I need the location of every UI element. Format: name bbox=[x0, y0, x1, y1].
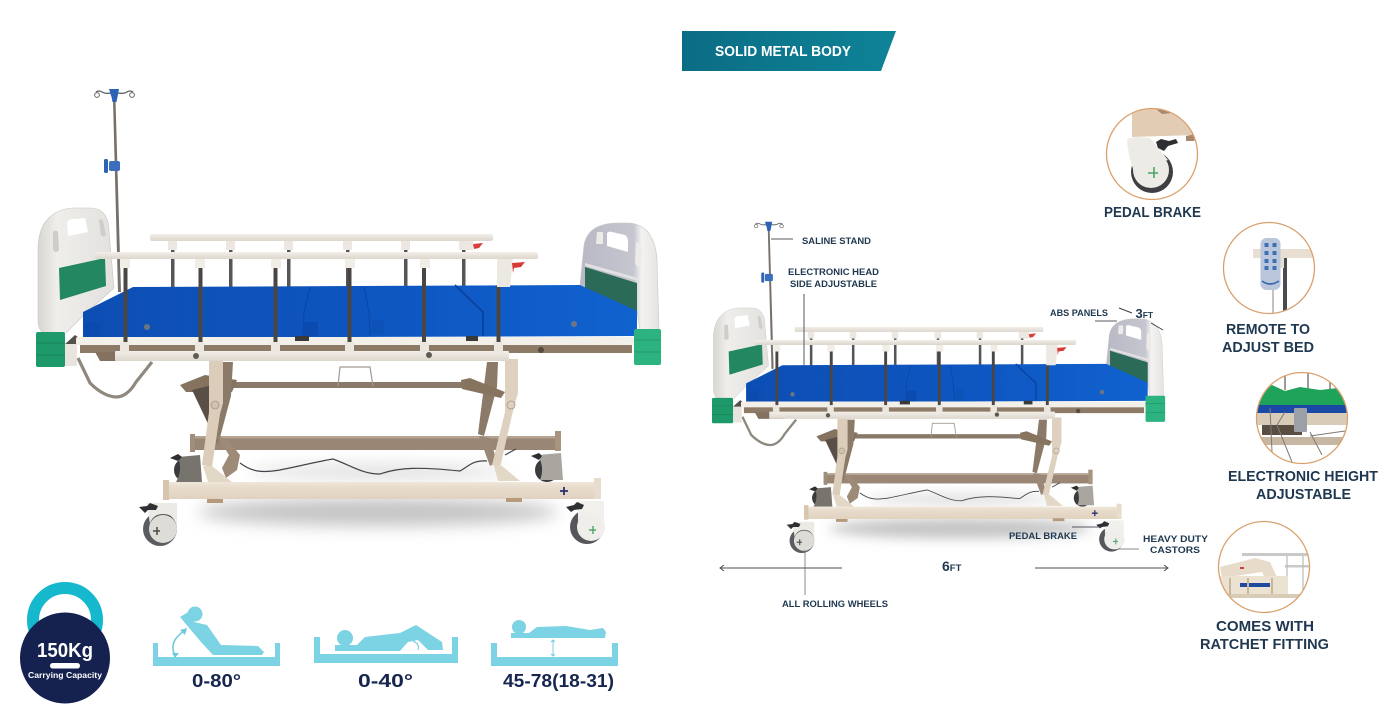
dimension: 6 ft length bbox=[720, 558, 1168, 574]
feature: remote to adjust bed: REMOTE TO bbox=[1226, 321, 1310, 338]
banner: solid metal body bbox=[682, 31, 896, 71]
large hospital bed photo bbox=[36, 89, 661, 546]
feature: remote to adjust bed bbox=[1222, 222, 1315, 356]
deck and frame bbox=[76, 336, 634, 361]
icon: motor control close-up bbox=[1256, 372, 1348, 464]
left mounting bracket and cord bbox=[64, 335, 152, 397]
right headboard bbox=[580, 223, 659, 330]
dimension: 3 ft width bbox=[1119, 306, 1163, 330]
scissor legs bbox=[180, 359, 520, 482]
callout: abs panels: ABS PANELS bbox=[1050, 308, 1108, 319]
hanger and crossbars bbox=[190, 367, 561, 452]
back side rail bbox=[150, 234, 493, 288]
small annotated hospital bed bbox=[712, 222, 1165, 553]
callout: pedal brake: PEDAL BRAKE bbox=[1009, 531, 1077, 542]
undercarriage bbox=[139, 359, 605, 546]
weight capacity badge: 150Kg bbox=[37, 640, 93, 662]
icon: ratchet frame close-up bbox=[1218, 522, 1310, 612]
front base bar bbox=[163, 478, 601, 503]
feature: comes with ratchet fitting: COMES WITH bbox=[1216, 618, 1314, 635]
dimension: 6 ft length: 6FT bbox=[942, 558, 962, 574]
left headboard bbox=[38, 208, 114, 333]
power cable bbox=[240, 449, 516, 474]
feature: pedal brake bbox=[1104, 108, 1201, 221]
green corner bumpers bbox=[36, 329, 661, 367]
feature: remote to adjust bed: ADJUST BED bbox=[1222, 339, 1314, 356]
saline stand bbox=[95, 89, 134, 292]
mattress bbox=[83, 285, 637, 338]
callout: electronic head side adjustable: ELECTRONIC HEAD bbox=[788, 267, 879, 278]
callout: saline stand bbox=[771, 236, 871, 247]
callout: heavy duty castors: CASTORS bbox=[1150, 545, 1200, 556]
front side rail bbox=[95, 252, 538, 361]
position icon: knee rest 0-40 degrees bbox=[314, 625, 458, 691]
front left castor bbox=[139, 503, 177, 546]
callout: electronic head side adjustable: SIDE ADJUSTABLE bbox=[790, 279, 877, 290]
banner: solid metal body: SOLID METAL BODY bbox=[715, 44, 851, 60]
weight capacity badge bbox=[20, 588, 110, 704]
rear castors bbox=[170, 453, 563, 482]
feature: electronic height adjustable bbox=[1228, 372, 1378, 503]
icon: castor close-up bbox=[1106, 108, 1198, 200]
callout: heavy duty castors bbox=[1118, 534, 1209, 556]
callout: electronic head side adjustable bbox=[788, 267, 879, 365]
position icon: height 45-78: 45-78(18-31) bbox=[503, 671, 614, 691]
front right castor bbox=[566, 501, 605, 544]
position icon: back rest 0-80 degrees: 0-80° bbox=[192, 671, 241, 691]
callout: pedal brake bbox=[1009, 527, 1100, 542]
weight capacity badge: Carrying Capacity bbox=[28, 671, 103, 680]
icon: hand remote bbox=[1224, 222, 1315, 316]
feature: pedal brake: PEDAL BRAKE bbox=[1104, 204, 1201, 221]
feature: electronic height adjustable: ELECTRONIC HEIGHT bbox=[1228, 468, 1378, 485]
position icon: back rest 0-80 degrees bbox=[153, 606, 280, 691]
position icon: height 45-78 bbox=[491, 620, 618, 691]
callout: all rolling wheels bbox=[782, 550, 888, 610]
floor shadow bbox=[198, 464, 558, 526]
callout: heavy duty castors: HEAVY DUTY bbox=[1143, 534, 1209, 545]
feature: comes with ratchet fitting bbox=[1200, 522, 1329, 653]
callout: saline stand: SALINE STAND bbox=[802, 236, 871, 247]
feature: electronic height adjustable: ADJUSTABLE bbox=[1256, 486, 1351, 503]
feature: comes with ratchet fitting: RATCHET FITTING bbox=[1200, 636, 1329, 653]
callout: all rolling wheels: ALL ROLLING WHEELS bbox=[782, 599, 888, 610]
dimension: 3 ft width: 3FT bbox=[1136, 306, 1154, 321]
position icon: knee rest 0-40 degrees: 0-40° bbox=[358, 671, 413, 691]
